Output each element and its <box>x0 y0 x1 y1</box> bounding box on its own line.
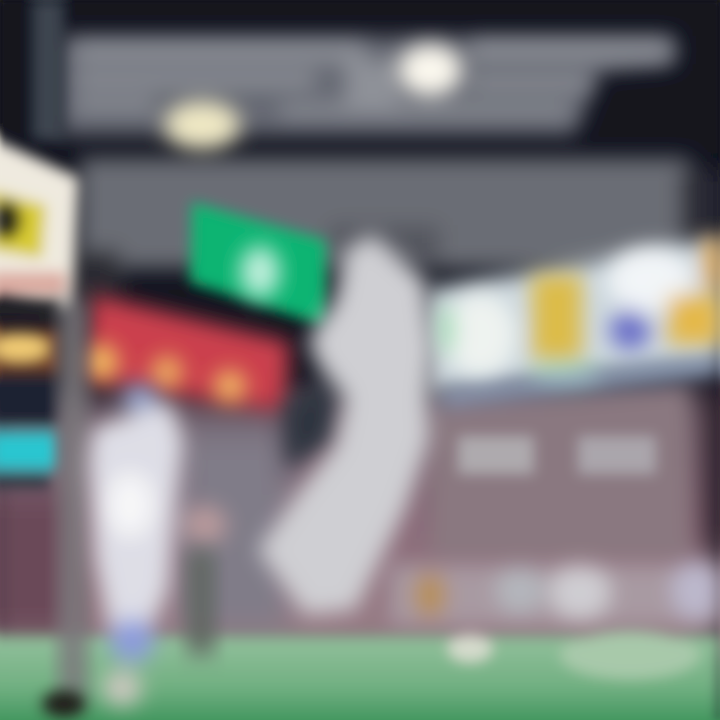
title sign lettering strips <box>75 42 670 116</box>
stadium support pole <box>32 0 86 718</box>
playing field grass <box>0 631 720 720</box>
stand windows <box>458 436 656 474</box>
stadium floodlight: cream <box>164 101 240 149</box>
crowd stands <box>0 385 720 655</box>
light underside of banner <box>440 356 720 406</box>
lower right stand <box>430 385 690 560</box>
football player <box>88 384 227 706</box>
green banner <box>190 202 326 326</box>
stadium floodlight: white <box>398 44 462 96</box>
scoreboard lights <box>86 344 246 402</box>
left scoreboard panels <box>0 300 62 488</box>
crowd front row <box>390 560 720 625</box>
dark wedge between scoreboard and silhouette <box>282 375 335 470</box>
second player on sideline <box>188 550 214 655</box>
state-shaped silhouette <box>258 234 434 615</box>
red scoreboard <box>84 294 290 412</box>
colourful right banner <box>428 238 720 392</box>
green banner emblem <box>240 246 280 298</box>
upper stadium band <box>60 158 720 300</box>
title sign backdrop <box>60 36 675 135</box>
left video screen <box>0 135 78 312</box>
